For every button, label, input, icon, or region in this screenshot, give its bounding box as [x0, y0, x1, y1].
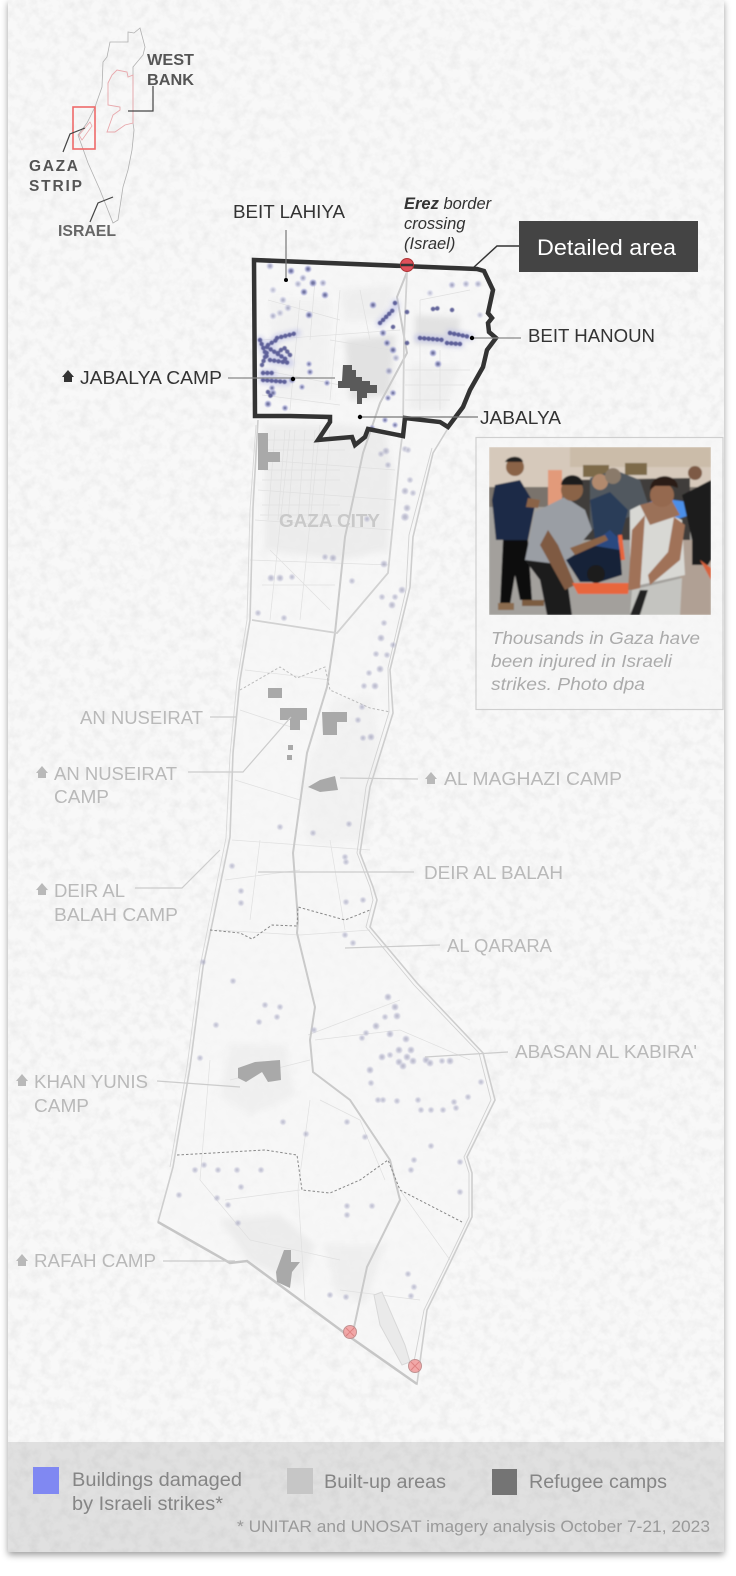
stretcher: [572, 583, 630, 594]
label: Erez border crossing: (Israel): [404, 235, 455, 253]
label: Abasan Al Kabira: [425, 1042, 697, 1062]
legend swatch: refugee camps: [492, 1469, 517, 1495]
legend swatch: built-up: [287, 1468, 313, 1494]
land area: [158, 262, 495, 1384]
label: An Nuseirat Camp: CAMP: [54, 787, 109, 807]
legend text: refugee camps: Refugee camps: [529, 1472, 667, 1493]
marker: Kerem Shalom crossing: [408, 1360, 422, 1372]
callout: detailed area: [473, 221, 698, 272]
West Bank outline: [107, 70, 133, 132]
label: Al Qarara: [345, 936, 552, 956]
label: Deir Al Balah Camp: BALAH CAMP: [54, 905, 178, 925]
Israel outline: [78, 28, 145, 223]
damage clusters: [260, 303, 470, 398]
map: Gaza Strip: [158, 262, 495, 1384]
damage dots: [265, 263, 482, 430]
marker: Rafah crossing: [344, 1326, 356, 1338]
West Bank label: [147, 52, 195, 89]
legend text: damaged buildings: [72, 1470, 242, 1515]
detailed area border: [254, 260, 496, 445]
label: Khan Yunis Camp: KHAN YUNIS: [34, 1072, 148, 1092]
person left: [492, 480, 535, 540]
Gaza west road: [170, 425, 256, 1167]
label: Jabalya Camp: JABALYA CAMP: [80, 368, 222, 388]
label: Rafah Camp: [16, 1251, 235, 1271]
West Bank label: BANK: [147, 72, 195, 89]
panel: photo and caption: been injured in Israeli: [491, 651, 673, 671]
coast and border outline: [158, 420, 495, 1384]
caption: Thousands in Gaza have: [491, 628, 700, 648]
built-up areas: [220, 285, 460, 1305]
airport: [374, 1292, 410, 1365]
label: Rafah Camp: RAFAH CAMP: [34, 1251, 156, 1271]
minor roads: [200, 280, 470, 1300]
label: Abasan Al Kabira: ABASAN AL KABIRA': [515, 1042, 697, 1062]
Gaza Strip label: STRIP: [29, 178, 82, 195]
label: An Nuseirat Camp: [36, 717, 291, 807]
legend: [33, 1467, 710, 1536]
label: An Nuseirat Camp: AN NUSEIRAT: [54, 764, 177, 784]
label: Erez border crossing: Erez border: [404, 195, 491, 213]
faded damage dots: [177, 447, 483, 1299]
main highway: [293, 272, 407, 1332]
legend band background: [8, 1442, 724, 1552]
Israel leader: [90, 197, 113, 222]
label: Jabalya: JABALYA: [480, 408, 561, 428]
refugee camps: faded: [238, 433, 347, 1288]
label: Beit Lahiya: BEIT LAHIYA: [233, 202, 345, 222]
label: Al Maghazi Camp: AL MAGHAZI CAMP: [444, 769, 622, 789]
legend text: damaged buildings: by Israeli strikes*: [72, 1494, 224, 1515]
West Bank leader: [128, 86, 153, 111]
red locator box: [73, 107, 95, 149]
label: Gaza City: GAZA CITY: [279, 510, 381, 531]
Gaza leader: [63, 128, 85, 152]
legend text: built-up: Built-up areas: [324, 1472, 446, 1493]
label: Al Maghazi Camp: [340, 769, 622, 789]
label: Beit Hanoun: [470, 326, 655, 346]
label: Beit Hanoun: BEIT HANOUN: [528, 326, 655, 346]
label: Erez border crossing: crossing: [404, 215, 466, 233]
panel: photo and caption: [476, 438, 723, 710]
legend swatch: damaged buildings: [33, 1467, 59, 1494]
panel: photo and caption: strikes. Photo dpa: [491, 674, 645, 694]
callout: detailed area: Detailed area: [537, 235, 676, 260]
photo: [489, 447, 711, 615]
label: Deir Al Balah Camp: DEIR AL: [54, 881, 125, 901]
source note: * UNITAR and UNOSAT imagery analysis October 7-21, 2023: [237, 1517, 710, 1536]
inner coast road: [357, 448, 491, 1372]
label: Deir Al Balah Camp: [36, 850, 220, 925]
detail area damage: [260, 263, 482, 430]
patient: [566, 545, 622, 582]
label: An Nuseirat: AN NUSEIRAT: [80, 708, 203, 728]
southern border road: [158, 1222, 417, 1384]
marker: Erez crossing: [400, 258, 414, 272]
label: Khan Yunis Camp: [16, 1072, 240, 1116]
label: Deir Al Balah: DEIR AL BALAH: [424, 863, 563, 883]
locator map: [29, 28, 195, 240]
Gaza small outline: [79, 122, 92, 140]
Israel label: ISRAEL: [58, 223, 116, 240]
person grey shirt: [525, 497, 592, 568]
Gaza Strip label: GAZA: [29, 158, 78, 175]
label: Jabalya: [358, 408, 561, 428]
damage halo: [260, 303, 470, 382]
label: Beit Lahiya: [233, 202, 345, 282]
Gaza Strip label: [29, 158, 82, 195]
person tank top: [630, 505, 685, 585]
refugee camp: Jabalya: [338, 365, 377, 404]
second road: [252, 272, 407, 633]
label: Khan Yunis Camp: CAMP: [34, 1096, 89, 1116]
panel frame: [476, 438, 723, 710]
legend text: damaged buildings: Buildings damaged: [72, 1470, 242, 1491]
dashed governorate lines: [177, 667, 462, 1222]
label: Al Qarara: AL QARARA: [447, 936, 552, 956]
label: Jabalya Camp: [62, 368, 335, 388]
West Bank label: WEST: [147, 52, 195, 69]
